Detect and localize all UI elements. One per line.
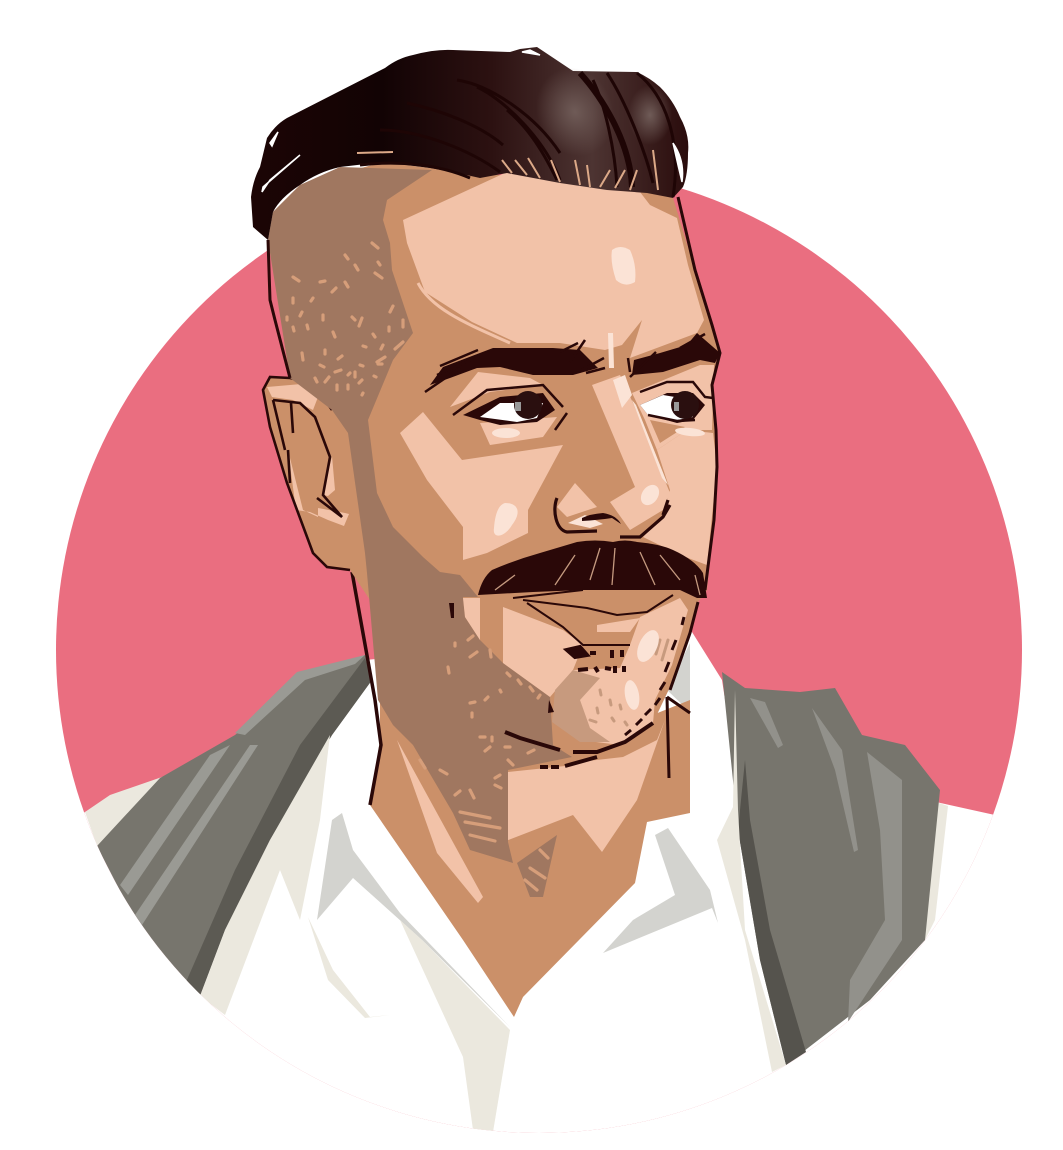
ear light rim bbox=[267, 383, 349, 526]
head base bbox=[268, 162, 720, 772]
stubble specks on shaved side bbox=[287, 243, 548, 890]
beard patch bbox=[552, 670, 610, 742]
mole bbox=[449, 603, 454, 618]
chin left light bbox=[503, 607, 583, 697]
right shirt cream edge bbox=[717, 690, 786, 1072]
left eyebrow bbox=[425, 340, 605, 392]
right jacket bbox=[722, 672, 940, 1065]
left jacket bbox=[97, 655, 372, 996]
collar left lower cream fold bbox=[400, 920, 510, 1132]
white shirt base bbox=[84, 632, 993, 1133]
shirt back right cream bbox=[924, 802, 948, 942]
shaved side shadow bbox=[268, 167, 572, 863]
right cheek light bbox=[643, 430, 717, 565]
pink background circle bbox=[56, 167, 1022, 1133]
forehead light bbox=[403, 172, 704, 358]
right eye surround light bbox=[632, 365, 714, 450]
chin highlights bbox=[623, 627, 663, 711]
clothing bbox=[84, 632, 993, 1133]
jaw corner light bbox=[463, 598, 480, 640]
left eye bbox=[453, 385, 567, 430]
right eye bbox=[640, 382, 713, 423]
forehead arc bbox=[418, 283, 510, 343]
right eyebrow bbox=[628, 333, 720, 377]
shirt back left sliver bbox=[85, 777, 162, 846]
nose bridge streak bbox=[608, 333, 614, 368]
under left eye highlight bbox=[492, 428, 520, 438]
hair bbox=[251, 47, 688, 240]
nose light bbox=[592, 375, 670, 530]
ear outline bbox=[263, 377, 350, 570]
chin specks bbox=[590, 640, 668, 725]
under left eye light bbox=[480, 417, 557, 445]
forehead highlight bbox=[612, 247, 635, 285]
lower lip highlight bbox=[597, 618, 640, 632]
jaw line bbox=[505, 723, 653, 767]
neck stubble patch bbox=[517, 835, 557, 897]
neck light bbox=[503, 720, 665, 852]
face outline bbox=[268, 197, 720, 778]
left jacket highlights bbox=[120, 655, 372, 996]
chin right light bbox=[573, 598, 688, 745]
cheek highlight bbox=[494, 503, 518, 536]
under right eye shade bbox=[650, 420, 685, 443]
ear bbox=[263, 377, 370, 573]
nostril bbox=[582, 513, 621, 524]
hair sheen bbox=[524, 57, 672, 167]
right jacket highlights bbox=[738, 698, 902, 1065]
neck light strip bbox=[397, 740, 483, 903]
hair skin tips bbox=[357, 150, 658, 190]
chin triangle mark bbox=[548, 700, 554, 713]
shirt thin cream fold bbox=[308, 917, 390, 1018]
cheek light bbox=[400, 412, 563, 560]
hair strands bbox=[360, 73, 675, 197]
nose outline bbox=[555, 498, 670, 537]
grey shirt inside collar bbox=[667, 643, 690, 712]
hair thick strand bbox=[580, 73, 632, 187]
under right eye highlight bbox=[675, 426, 705, 438]
neck outline bbox=[352, 572, 381, 805]
left shirt cream lapel bbox=[200, 735, 330, 1015]
hair gaps bbox=[262, 50, 683, 192]
nose highlights bbox=[613, 375, 668, 509]
left nostril highlight bbox=[568, 515, 603, 528]
collar right grey shadow bbox=[603, 828, 718, 953]
jaw stubble dashes bbox=[625, 617, 684, 735]
moustache bbox=[478, 540, 707, 598]
neck bbox=[370, 700, 690, 1017]
soul patch stubble bbox=[567, 647, 624, 673]
mouth lines bbox=[513, 590, 673, 645]
left nostril light bbox=[557, 483, 597, 517]
under brow light bbox=[450, 372, 543, 407]
collar left grey shadow bbox=[317, 813, 510, 1027]
